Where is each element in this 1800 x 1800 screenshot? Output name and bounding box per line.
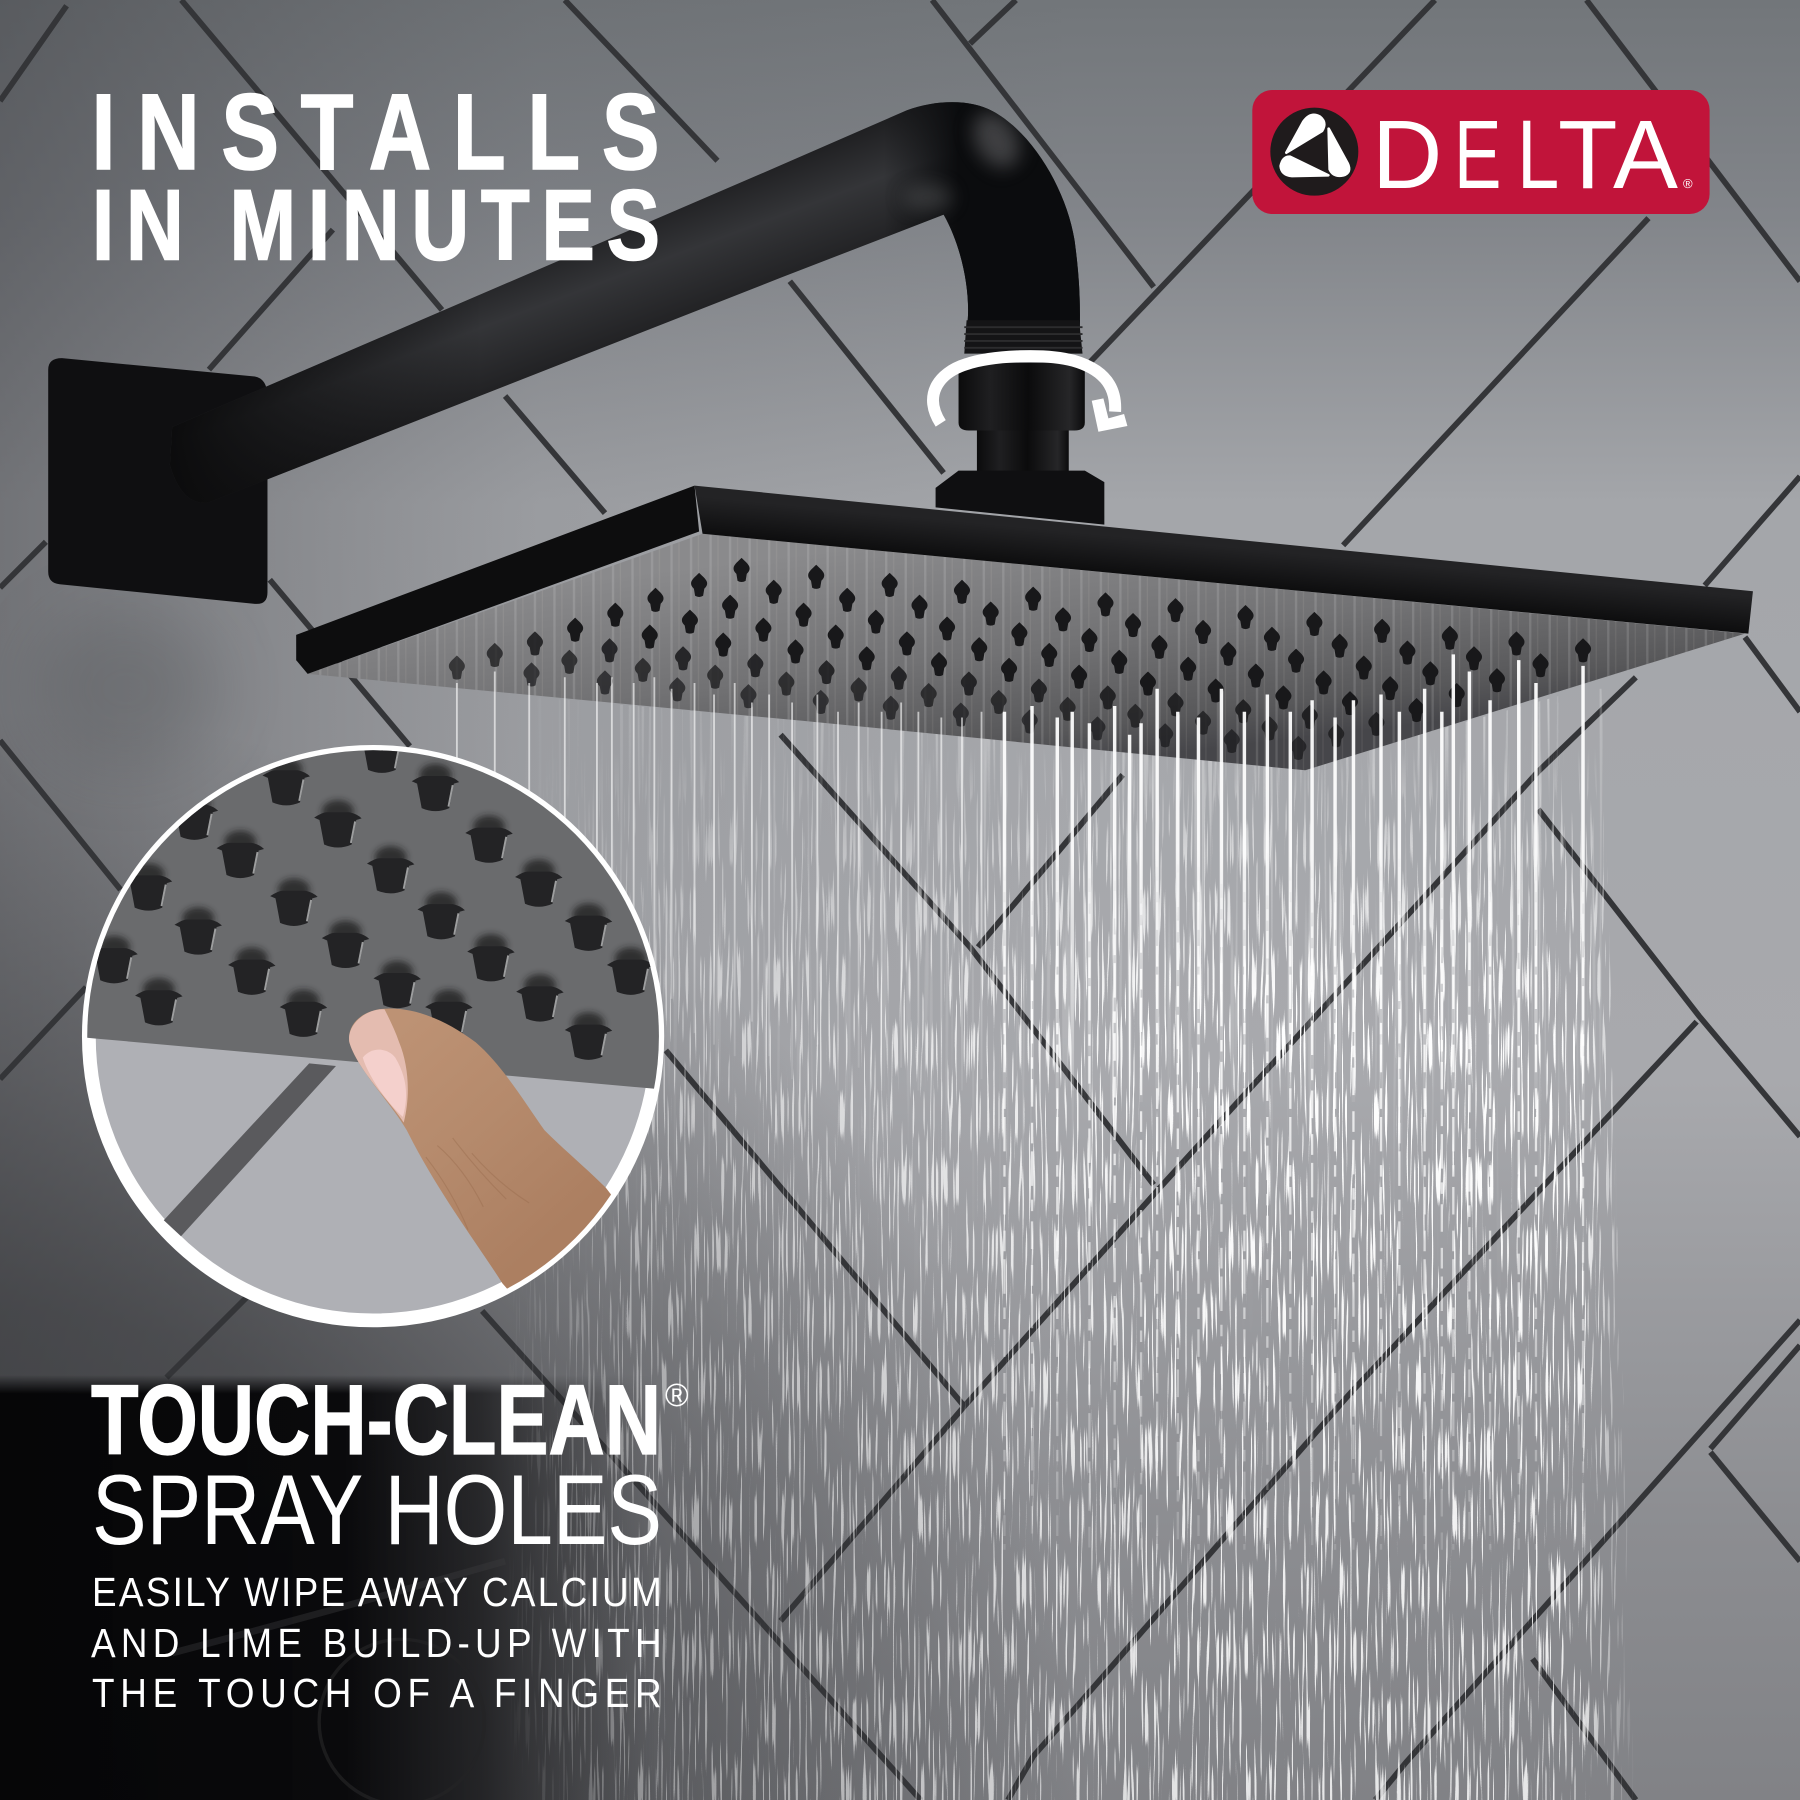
spray nozzles (449, 558, 1591, 760)
rotation arrow (933, 356, 1127, 432)
nozzle plate (70, 740, 670, 1090)
feature description: AND LIME BUILD-UP WITH (91, 1621, 662, 1666)
feature heading: touch-clean spray holes: TOUCH-CLEAN (91, 1364, 661, 1475)
logo mark (1270, 108, 1358, 196)
heading: installs in minutes: IN MINUTES (92, 170, 660, 282)
heading: installs in minutes (92, 71, 660, 282)
logo wordmark (1372, 100, 1678, 210)
broken water columns (1004, 792, 1583, 1550)
feature description: THE TOUCH OF A FINGER (92, 1671, 662, 1716)
logo wordmark: L (1517, 100, 1559, 209)
wall shadow under plate (34, 608, 218, 769)
feature heading: touch-clean spray holes: SPRAY HOLES (92, 1454, 662, 1565)
heading: installs in minutes: INSTALLS (92, 71, 659, 192)
finger (349, 1008, 611, 1289)
wall mounting plate (48, 358, 267, 604)
registered mark on logo: ® (1683, 176, 1693, 191)
head rim (296, 486, 699, 674)
Delta logo badge (1252, 90, 1710, 214)
dark foreground fixture area, lower left (0, 1377, 629, 1800)
feature description: EASILY WIPE AWAY CALCIUM (92, 1570, 662, 1615)
logo wordmark: D (1372, 100, 1442, 209)
logo wordmark: E (1454, 101, 1501, 210)
threaded connector and collar (936, 320, 1104, 525)
logo wordmark: A (1613, 100, 1678, 209)
head underside (308, 534, 1745, 770)
falling water spray (436, 689, 1653, 1800)
feature description (91, 1570, 662, 1716)
shower arm (250, 102, 1080, 480)
feature heading: touch-clean spray holes: ® (665, 1377, 689, 1413)
close-up nozzles (90, 725, 654, 1060)
grout line in inset (164, 1063, 336, 1236)
logo wordmark: T (1558, 100, 1618, 209)
inset circle: touch-clean close-up (70, 725, 670, 1320)
water jets leaving the nozzles (457, 654, 1583, 1125)
feature heading: touch-clean spray holes (91, 1364, 689, 1565)
rain shower head (296, 486, 1753, 770)
